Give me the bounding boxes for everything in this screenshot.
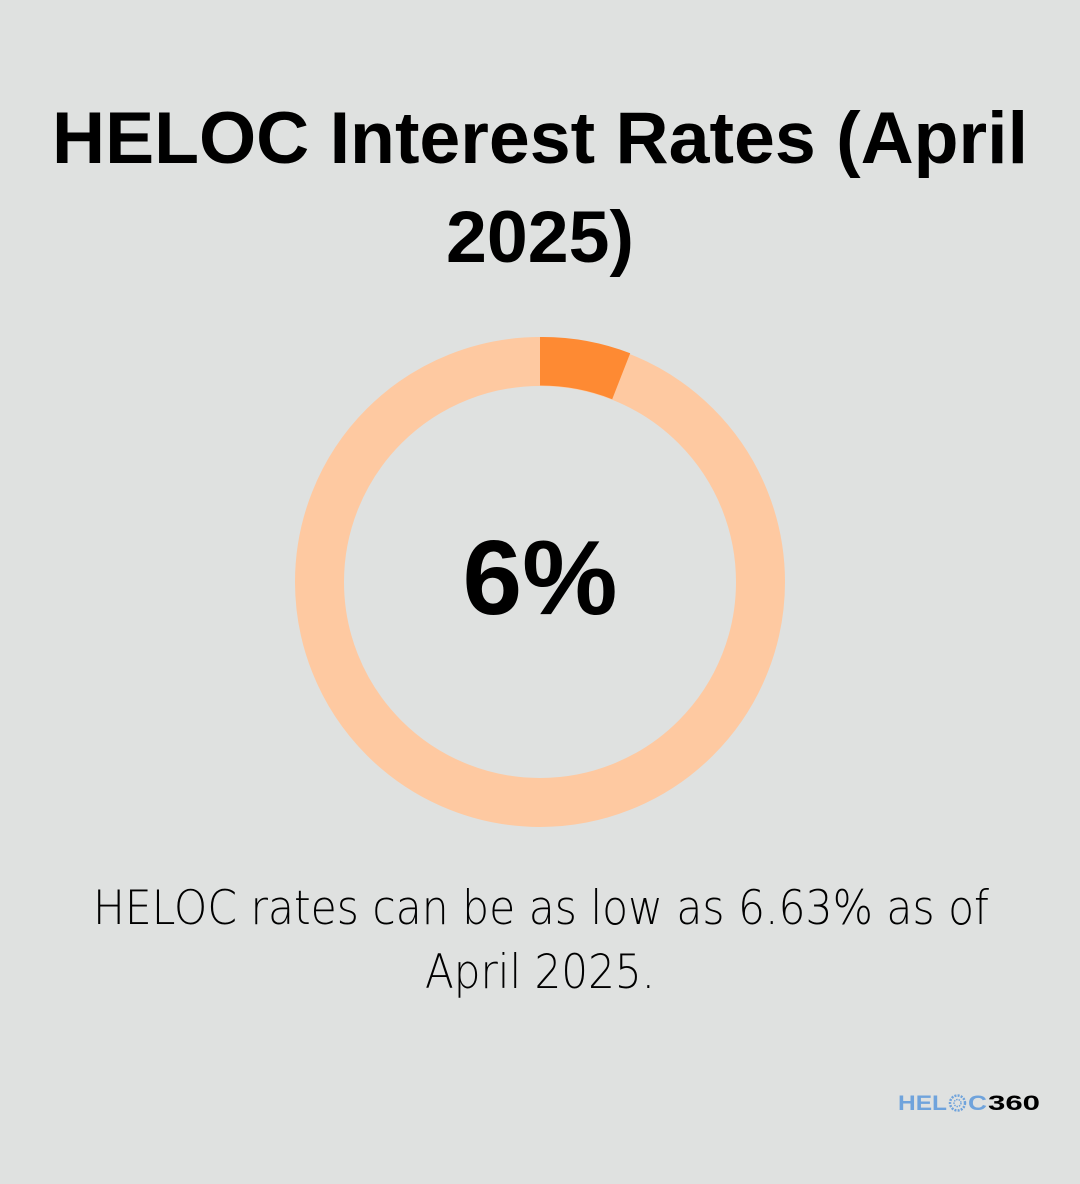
logo text: C: C xyxy=(968,1092,987,1115)
caption xyxy=(93,881,989,1000)
logo text: 360: 360 xyxy=(988,1092,1040,1115)
donut chart xyxy=(320,337,760,802)
donut highlighted segment: 6% xyxy=(540,337,630,399)
title xyxy=(52,98,1028,278)
logo text: HEL: HEL xyxy=(898,1092,947,1115)
title: 2025) xyxy=(446,197,634,278)
caption: HELOC rates can be as low as 6.63% as of xyxy=(93,881,989,936)
logo: HELOC360 xyxy=(898,1092,1040,1115)
donut center value: 6% xyxy=(462,519,618,637)
donut track xyxy=(320,362,760,802)
caption: April 2025. xyxy=(425,945,655,1000)
logo icon: swirl xyxy=(950,1096,965,1110)
title: HELOC Interest Rates (April xyxy=(52,98,1028,179)
